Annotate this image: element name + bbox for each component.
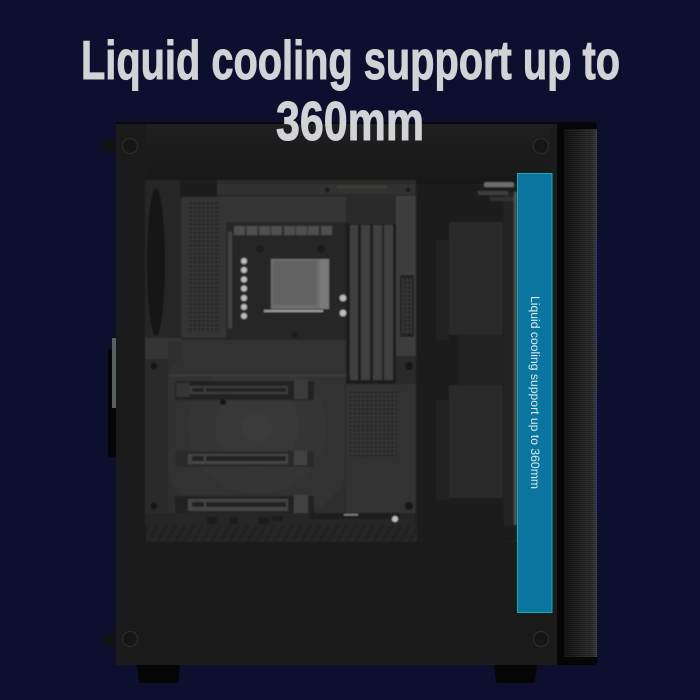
side window top shade [146,124,551,184]
blue bar [518,174,552,612]
computer case illustration [103,122,597,683]
chipset cover [168,341,346,513]
tubing highlight [484,182,514,187]
highlighted radiator callout [518,174,552,612]
right lower board [346,384,416,513]
socket area [226,222,350,340]
title line 2: 360mm [276,90,424,152]
lower perforation [350,390,397,457]
fan panel middle [459,335,503,385]
motherboard [145,180,517,542]
board screw holes [150,362,413,510]
top strip shadow [145,180,217,197]
left fan [145,180,180,340]
mount holes [256,245,325,338]
lower shroud panel [146,542,517,665]
board base [145,180,416,525]
atx strip [396,196,416,356]
case feet [137,664,537,683]
cpu socket [264,259,329,312]
top edge strip [217,184,415,194]
ram slots [346,224,396,384]
rotated label: Liquid cooling support up to 360mm [528,296,540,489]
bottom header strip [145,513,416,525]
io heatsink vertical [182,197,226,337]
rear thumb screws [103,140,116,646]
left vrm column [228,232,232,328]
heatsink perforation [187,200,220,333]
lower-left heatsink block [145,338,181,359]
vrm tiles [234,226,332,235]
reflective floor stripes [146,525,417,542]
rear bracket [108,338,116,457]
side panel [116,122,557,665]
title [81,29,620,152]
front panel mesh [556,122,597,665]
fan panel bottom [449,385,503,498]
io heatsink horizontal [182,197,346,222]
fan panel top [449,222,503,335]
radiator fins [503,192,514,542]
side frame column [116,124,146,665]
internals: right compartment [416,182,517,542]
pcie slot 3 [175,495,314,515]
case screws [122,138,548,646]
capacitor dots [241,258,346,319]
pcie slot 2 [175,451,314,467]
pcie slot 1 [175,380,314,400]
